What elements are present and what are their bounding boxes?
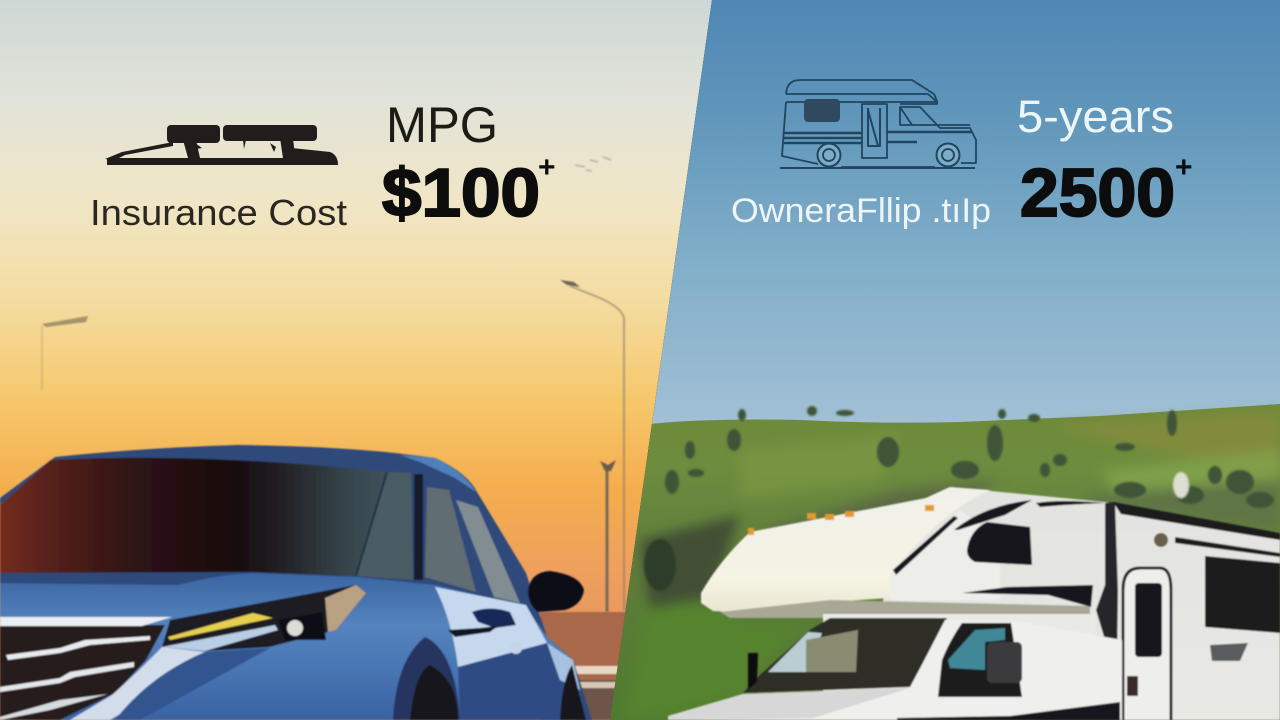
windshield <box>0 458 387 576</box>
stripes and windows <box>893 516 958 575</box>
value: $100+: $100 <box>382 155 540 231</box>
panel: RV side, sky and hillside <box>600 0 1280 720</box>
cab side window <box>938 623 1022 697</box>
door <box>1123 568 1171 720</box>
cabover <box>701 487 990 612</box>
white band <box>0 617 172 626</box>
label: 5-years: 5-years <box>1017 91 1174 142</box>
ground and rail <box>540 612 635 720</box>
grille <box>0 625 165 720</box>
door with reflection <box>435 587 547 667</box>
motorhome <box>668 487 1280 720</box>
hood and fender <box>0 573 585 720</box>
clearance lights <box>748 505 934 535</box>
wheel arches <box>393 637 460 720</box>
lower stripes <box>897 702 1120 720</box>
label: Ownership: OwneraFllip .tıIp <box>731 192 991 230</box>
hood and cab <box>668 620 1122 720</box>
side mirror <box>528 571 584 612</box>
headlight <box>162 585 366 651</box>
value: 2500+: + <box>1175 151 1193 184</box>
car <box>0 445 592 720</box>
icon: motorhome outline <box>780 80 976 168</box>
street lamps <box>42 157 624 612</box>
value: $100+: + <box>538 151 556 184</box>
icon: car silhouette <box>105 125 338 165</box>
windshield <box>743 618 947 693</box>
value: 2500+: 2500 <box>1020 155 1175 231</box>
hillside <box>600 404 1280 720</box>
chrome sweep <box>70 647 205 720</box>
panel: car side, sunset background <box>0 0 720 720</box>
label: MPG: MPG <box>386 97 498 153</box>
shrubs <box>644 406 1274 591</box>
side window <box>1205 556 1280 633</box>
label: Insurance Cost: Insurance Cost <box>90 192 347 233</box>
